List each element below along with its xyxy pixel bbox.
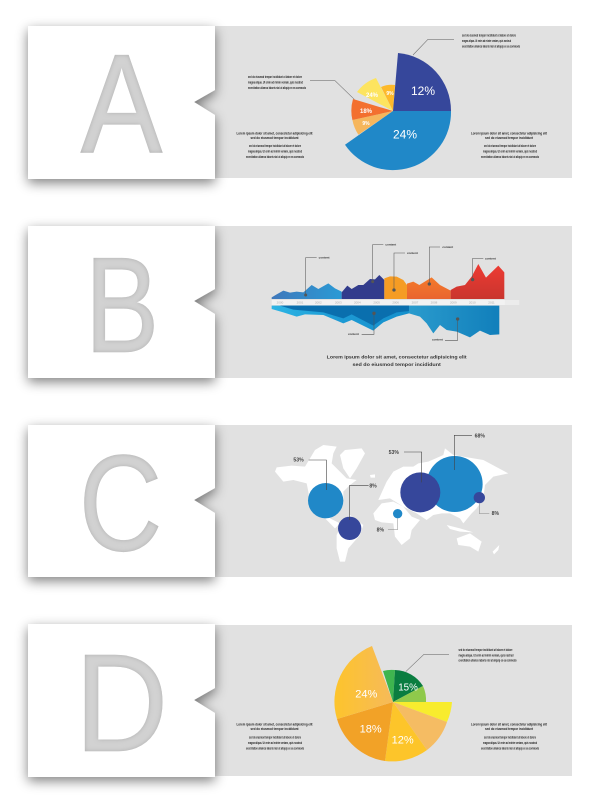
chart: area chart B: content (485, 256, 496, 260)
text: D top right: sed do eiusmod tempor incididunt ut labore et dolore (458, 648, 513, 652)
letter D: D (75, 626, 168, 780)
chart: area chart B: 2004 (354, 301, 361, 305)
panel: D background (190, 625, 572, 776)
world map (272, 445, 508, 562)
chart: pie D: 15% (398, 682, 418, 694)
panel: C background (190, 425, 572, 577)
chart: world map bubbles C (272, 434, 508, 562)
chart: pie A: 24% (366, 93, 379, 99)
chart: area chart B: content (432, 338, 443, 342)
chart: area chart B: 2007 (412, 301, 419, 305)
text: D bottom left: Lorem ipsum dolor sit amet, consectetur adipisicing elit (236, 722, 313, 726)
text: A left: exercitation ullamco laboris nisi ut aliquip ex ea commodo (248, 86, 306, 90)
text: D bottom right (471, 722, 548, 750)
text: D top right (458, 648, 517, 663)
text: A top right: sed do eiusmod tempor incididunt ut labore et dolore (462, 34, 516, 38)
text: A left (248, 75, 306, 90)
text: D bottom left: magna aliqua. Ut enim ad minim veniam, quis nostrud (248, 741, 302, 745)
panel: A background (190, 26, 572, 178)
callout line D (406, 654, 449, 672)
chart: world map bubbles C: 8% (377, 527, 385, 533)
text: D bottom left: exercitation ullamco laboris nisi ut aliquip ex ea commodo (246, 746, 304, 750)
text: D bottom right: sed do eiusmod tempor incididunt ut labore et dolore (484, 736, 536, 740)
chart: pie D: 18% (360, 724, 382, 736)
text: D bottom right: Lorem ipsum dolor sit amet, consectetur adipisicing elit (471, 722, 548, 726)
card: D (28, 624, 215, 777)
chart: area chart B: 2000 (277, 301, 284, 305)
bubble 8% Japan (474, 492, 485, 503)
text: A bottom right (471, 132, 548, 159)
text: A bottom right: exercitation ullamco laboris nisi ut aliquip ex ea commodo (481, 155, 539, 159)
chart: pie D: 24% (355, 688, 378, 700)
chart: world map bubbles C: 53% (389, 450, 399, 456)
text: D bottom left (236, 722, 313, 750)
letter B: B (85, 230, 159, 380)
text: A bottom left: sed do eiusmod tempor incididunt (250, 136, 299, 140)
card: A (28, 26, 215, 179)
chart: area chart B: content (319, 256, 329, 260)
chart: area chart B: 2011 (488, 301, 495, 305)
chart: area chart B: 2005 (373, 301, 380, 305)
chart: pie D (334, 646, 452, 761)
text: A top right: exercitation ullamco laboris nisi ut aliquip ex ea commodo (462, 44, 520, 48)
text: D bottom right: exercitation ullamco laboris nisi ut aliquip ex ea commodo (481, 746, 539, 750)
callout lines A (310, 39, 454, 99)
chart: world map bubbles C: 53% (293, 458, 304, 464)
text: A bottom left: Lorem ipsum dolor sit amet, consectetur adipisicing elit (236, 132, 313, 136)
chart: pie A (345, 53, 451, 170)
bubble 8% South America (338, 517, 361, 540)
chart: area chart B: 2002 (315, 301, 322, 305)
chart: area chart B (272, 243, 519, 367)
chart: area chart B: content (385, 243, 396, 247)
chart: area chart B: 2001 (297, 301, 304, 305)
bubble 53% Middle East (400, 472, 440, 512)
chart: area chart B: 2008 (431, 301, 438, 305)
chart: pie A: 24% (393, 128, 417, 142)
text: A bottom right: magna aliqua. Ut enim ad minim veniam, quis nostrud (483, 150, 537, 154)
chart: pie D: 12% (392, 734, 414, 746)
chart: area chart B: Lorem ipsum dolor sit amet, consectetur adipisicing elit (327, 355, 467, 360)
chart: pie A: 12% (411, 84, 435, 98)
text: A bottom left (236, 132, 313, 159)
text: D bottom right: sed do eiusmod tempor incididunt (485, 727, 534, 731)
text: A bottom left: magna aliqua. Ut enim ad minim veniam, quis nostrud (248, 150, 302, 154)
text: A left: magna aliqua. Ut enim ad minim veniam, quis nostrud (248, 80, 303, 84)
text: A top right: magna aliqua. Ut enim ad minim veniam, quis nostrud (462, 39, 511, 43)
chart: area chart B: content (407, 251, 418, 255)
chart: area chart B: content (348, 332, 359, 336)
text: D top right: exercitation ullamco laboris nisi ut aliquip ex ea commodo (458, 659, 517, 663)
chart: world map bubbles C: 8% (492, 511, 500, 517)
text: A bottom left: exercitation ullamco laboris nisi ut aliquip ex ea commodo (246, 155, 304, 159)
chart: world map bubbles C: 68% (475, 434, 485, 440)
chart: pie A: 9% (386, 91, 394, 97)
chart: area chart B: 2010 (469, 301, 476, 305)
text: A top right (462, 34, 520, 48)
chart: pie A: 9% (362, 121, 370, 127)
card: B (28, 226, 215, 378)
text: D top right: magna aliqua. Ut enim ad minim veniam, quis nostrud (458, 653, 514, 657)
text: D bottom left: sed do eiusmod tempor incididunt (250, 727, 299, 731)
text: A bottom left: sed do eiusmod tempor incididunt ut labore et dolore (249, 144, 301, 148)
chart: world map bubbles C: 8% (369, 483, 377, 489)
text: A bottom right: sed do eiusmod tempor incididunt (485, 136, 534, 140)
text: A bottom right: Lorem ipsum dolor sit amet, consectetur adipisicing elit (471, 132, 548, 136)
panel: B background (190, 226, 572, 378)
chart: area chart B: content (442, 245, 453, 249)
bubble 53% America (308, 483, 343, 518)
chart: area chart B: 2006 (392, 301, 399, 305)
text: D bottom left: sed do eiusmod tempor incididunt ut labore et dolore (249, 736, 301, 740)
card: C (28, 425, 215, 577)
chart: area chart B: sed do eiusmod tempor incididunt (352, 362, 441, 367)
letter C: C (79, 427, 162, 579)
bubble 68% Asia (427, 456, 483, 512)
text: D bottom right: magna aliqua. Ut enim ad minim veniam, quis nostrud (483, 741, 537, 745)
letter A: A (81, 25, 163, 182)
chart: pie A: 18% (360, 109, 373, 115)
text: A left: sed do eiusmod tempor incididunt ut labore et dolore (248, 75, 302, 79)
text: A bottom right: sed do eiusmod tempor incididunt ut labore et dolore (484, 144, 536, 148)
chart: area chart B: 2003 (335, 301, 342, 305)
bubble 8% Africa (393, 509, 402, 518)
chart: area chart B: 2009 (450, 301, 457, 305)
